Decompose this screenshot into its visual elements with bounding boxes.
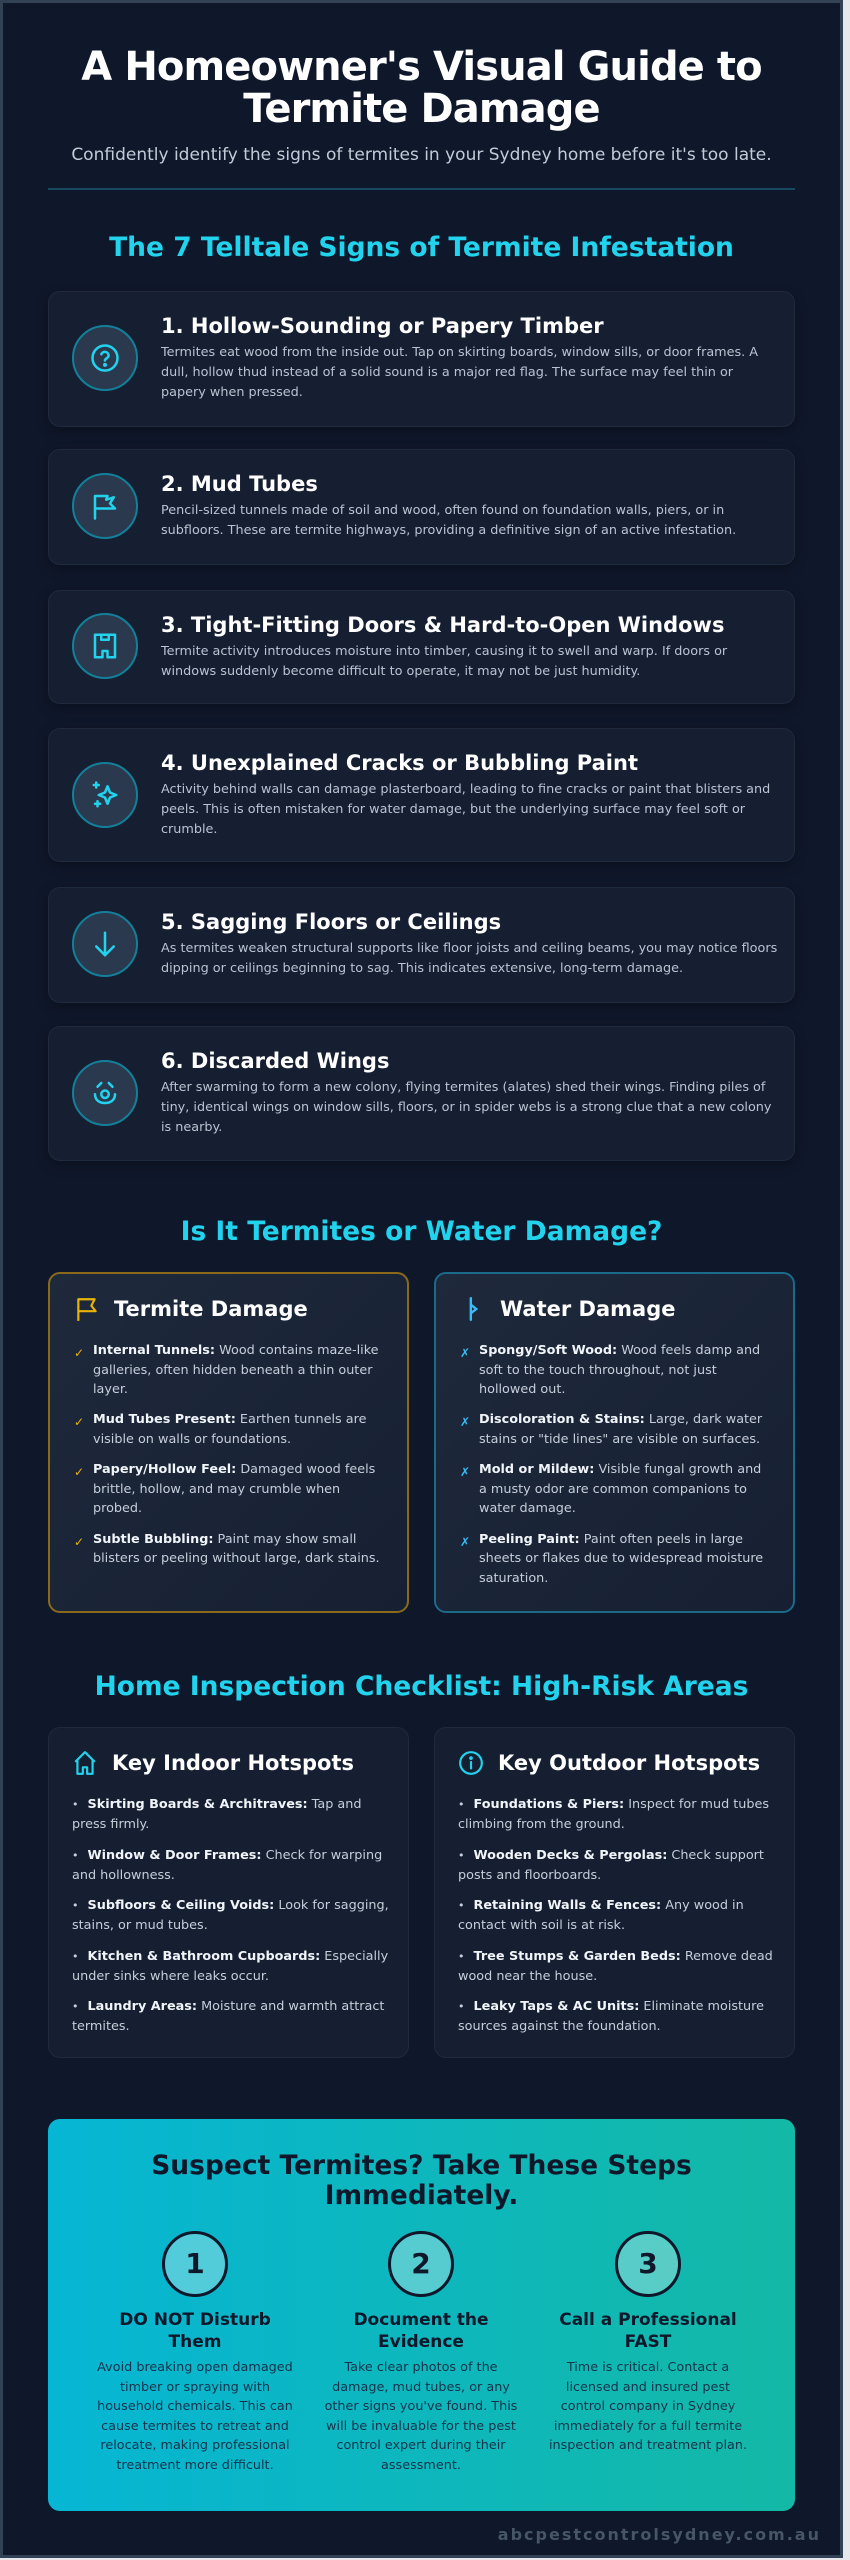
panel: indoor hotspots: Laundry Areas: Moisture and warmth attract termites. <box>72 1999 384 2034</box>
heading with drop icon: Water Damage <box>500 1297 675 1321</box>
icon: wings <box>72 1060 138 1126</box>
card 2: 2. Mud Tubes <box>161 472 318 496</box>
panel: water damage: ✗ <box>460 1465 470 1479</box>
panel: termite damage: ✓ <box>74 1415 84 1429</box>
subtitle: Confidently identify the signs of termites in your Sydney home before it's too late. <box>71 145 772 165</box>
icon: sparkles <box>72 762 138 828</box>
card 3 <box>48 590 795 704</box>
panel: water damage: ✗ <box>460 1346 470 1360</box>
card 3: Termite activity introduces moisture into timber, causing it to swell and warp. If doors or windows suddenly become difficult to operate, it may not be just humidity. <box>161 644 727 679</box>
panel: outdoor hotspots: Retaining Walls & Fences: Any wood in contact with soil is at risk. <box>458 1898 744 1933</box>
cta heading: Suspect Termites? Take These Steps <box>151 2150 692 2181</box>
cta heading: Immediately. <box>325 2180 518 2211</box>
step 1: 1 <box>185 2247 205 2280</box>
card 1: Termites eat wood from the inside out. Tap on skirting boards, window sills, or door frames. A dull, hollow thud instead of a solid sound is a major red flag. The surface may feel thin or papery when pressed. <box>161 345 758 400</box>
step 1: Avoid breaking open damaged timber or spraying with household chemicals. This can cause termites to retreat and relocate, making professional treatment more difficult. <box>97 2360 293 2473</box>
card 3: 3. Tight-Fitting Doors & Hard-to-Open Windows <box>161 613 724 637</box>
heading with house icon: Key Indoor Hotspots <box>112 1751 354 1775</box>
card 5: As termites weaken structural supports like floor joists and ceiling beams, you may notice floors dipping or ceilings beginning to sag. This indicates extensive, long-term damage. <box>161 941 777 976</box>
icon: arrow down <box>72 911 138 977</box>
panel: indoor hotspots <box>48 1727 409 2058</box>
step 2: Take clear photos of the damage, mud tubes, or any other signs you've found. This will be invaluable for the pest control expert during their assessment. <box>325 2360 517 2473</box>
panel: termite damage: ✓ <box>74 1535 84 1549</box>
step 3: Time is critical. Contact a licensed and insured pest control company in Sydney immediately for a full termite inspection and treatment plan. <box>549 2360 747 2453</box>
panel: water damage: ✗ <box>460 1535 470 1549</box>
card 1 <box>48 291 795 427</box>
panel: water damage: Discoloration & Stains: Large, dark water stains or "tide lines" are visible on surfaces. <box>479 1412 762 1447</box>
step 3 <box>549 2231 747 2453</box>
panel: termite damage: Subtle Bubbling: Paint may show small blisters or peeling without large, dark stains. <box>93 1532 380 1566</box>
heading: 7 signs: The 7 Telltale Signs of Termite Infestation <box>109 232 734 263</box>
heading: checklist: Home Inspection Checklist: High-Risk Areas <box>95 1671 748 1702</box>
step 1: DO NOT Disturb <box>119 2310 271 2330</box>
panel: termite damage <box>48 1272 409 1613</box>
panel: outdoor hotspots <box>434 1727 795 2058</box>
card 5: 5. Sagging Floors or Ceilings <box>161 910 501 934</box>
step 2: 2 <box>411 2247 431 2280</box>
card 6 <box>48 1026 795 1161</box>
icon: flag <box>72 473 138 539</box>
step 3: FAST <box>625 2332 671 2352</box>
footer url: abcpestcontrolsydney.com.au <box>498 2525 821 2544</box>
title <box>81 44 762 132</box>
step 1: Them <box>169 2332 221 2352</box>
panel: outdoor hotspots: Tree Stumps & Garden Beds: Remove dead wood near the house. <box>458 1948 773 1984</box>
panel: water damage <box>434 1272 795 1613</box>
card 2 <box>48 449 795 565</box>
panel: water damage: Mold or Mildew: Visible fungal growth and a musty odor are common companions to water damage. <box>479 1462 761 1516</box>
title: Termite Damage <box>243 86 600 132</box>
panel: call to action <box>48 2119 795 2511</box>
step 3: 3 <box>638 2247 658 2280</box>
cta heading <box>151 2150 692 2211</box>
panel: termite damage: Mud Tubes Present: Earthen tunnels are visible on walls or foundations. <box>93 1412 366 1447</box>
step 1 <box>97 2231 293 2473</box>
panel: water damage: Peeling Paint: Paint often peels in large sheets or flakes due to widespread moisture saturation. <box>479 1532 763 1586</box>
panel: termite damage: Papery/Hollow Feel: Damaged wood feels brittle, hollow, and may crumble when probed. <box>93 1462 375 1516</box>
card 1: 1. Hollow-Sounding or Papery Timber <box>161 314 604 338</box>
panel: indoor hotspots: Skirting Boards & Architraves: Tap and press firmly. <box>72 1797 361 1832</box>
step 2 <box>325 2231 517 2473</box>
icon: door <box>72 613 138 679</box>
panel: termite damage: Internal Tunnels: Wood contains maze-like galleries, often hidden beneath a thin outer layer. <box>93 1343 379 1397</box>
panel: water damage: Spongy/Soft Wood: Wood feels damp and soft to the touch throughout, not just hollowed out. <box>479 1343 760 1397</box>
step 2: Document the <box>353 2310 489 2330</box>
panel: indoor hotspots: Window & Door Frames: Check for warping and hollowness. <box>72 1848 382 1882</box>
step 2: Evidence <box>378 2332 464 2352</box>
card 6: After swarming to form a new colony, flying termites (alates) shed their wings. Finding piles of tiny, identical wings on window sills, floors, or in spider webs is a strong clue that a new colony is nearby. <box>161 1080 771 1135</box>
panel: indoor hotspots: Subfloors & Ceiling Voids: Look for sagging, stains, or mud tubes. <box>72 1898 389 1933</box>
title: A Homeowner's Visual Guide to <box>81 44 762 90</box>
panel: indoor hotspots: Kitchen & Bathroom Cupboards: Especially under sinks where leaks occur. <box>72 1948 388 1984</box>
panel: outdoor hotspots: Foundations & Piers: Inspect for mud tubes climbing from the ground. <box>458 1797 769 1832</box>
panel: water damage: ✗ <box>460 1415 470 1429</box>
heading: termites or water: Is It Termites or Water Damage? <box>181 1216 662 1247</box>
step 3: Call a Professional <box>559 2310 737 2330</box>
panel: termite damage: ✓ <box>74 1465 84 1479</box>
panel: termite damage: ✓ <box>74 1346 84 1360</box>
card 5 <box>48 887 795 1003</box>
heading with flag icon: Termite Damage <box>114 1297 308 1321</box>
card 6: 6. Discarded Wings <box>161 1049 389 1073</box>
card 2: Pencil-sized tunnels made of soil and wood, often found on foundation walls, piers, or in subfloors. These are termite highways, providing a definitive sign of an active infestation. <box>161 503 736 538</box>
card 4: Activity behind walls can damage plasterboard, leading to fine cracks or paint that blisters and peels. This is often mistaken for water damage, but the underlying surface may feel soft or crumble. <box>161 782 770 837</box>
heading with info icon: Key Outdoor Hotspots <box>498 1751 760 1775</box>
card 4: 4. Unexplained Cracks or Bubbling Paint <box>161 751 638 775</box>
panel: outdoor hotspots: Leaky Taps & AC Units: Eliminate moisture sources against the foundation. <box>458 1999 764 2034</box>
icon: question <box>72 325 138 391</box>
card 4 <box>48 728 795 862</box>
panel: outdoor hotspots: Wooden Decks & Pergolas: Check support posts and floorboards. <box>458 1848 764 1882</box>
